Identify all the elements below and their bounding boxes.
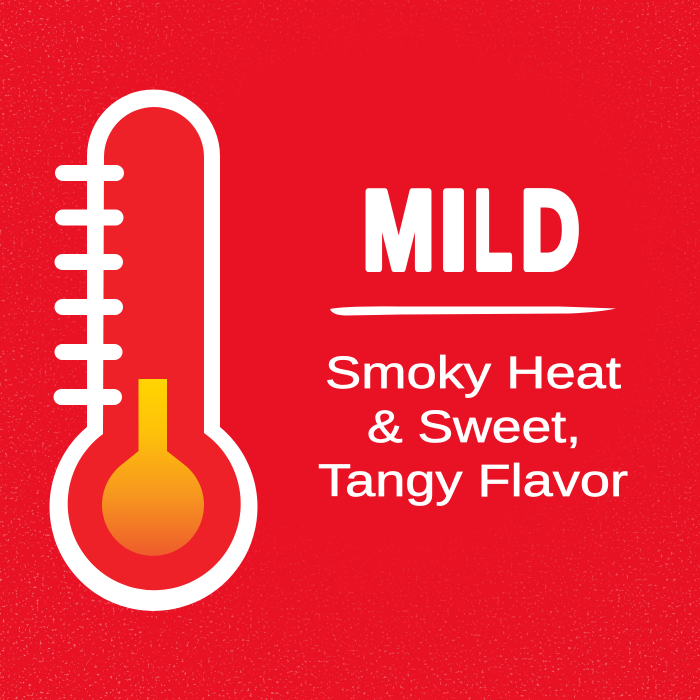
heading: MILD: I	[440, 168, 468, 292]
heading: MILD: M	[362, 168, 434, 292]
text block: flavor description: & Sweet,	[367, 401, 581, 452]
icon: thermometer	[50, 90, 258, 611]
heading: MILD: D	[521, 168, 580, 292]
text block: flavor description: Smoky Heat	[325, 347, 622, 398]
heading: MILD: L	[474, 168, 512, 292]
text block: flavor description	[318, 347, 628, 506]
mercury level	[102, 379, 204, 556]
text block: flavor description: Tangy Flavor	[318, 455, 628, 506]
heading: MILD	[362, 168, 580, 292]
thermometer outline	[50, 90, 258, 611]
divider brush line	[330, 306, 616, 316]
temperature scale ticks	[54, 165, 124, 405]
thermometer inner fill	[68, 107, 241, 590]
